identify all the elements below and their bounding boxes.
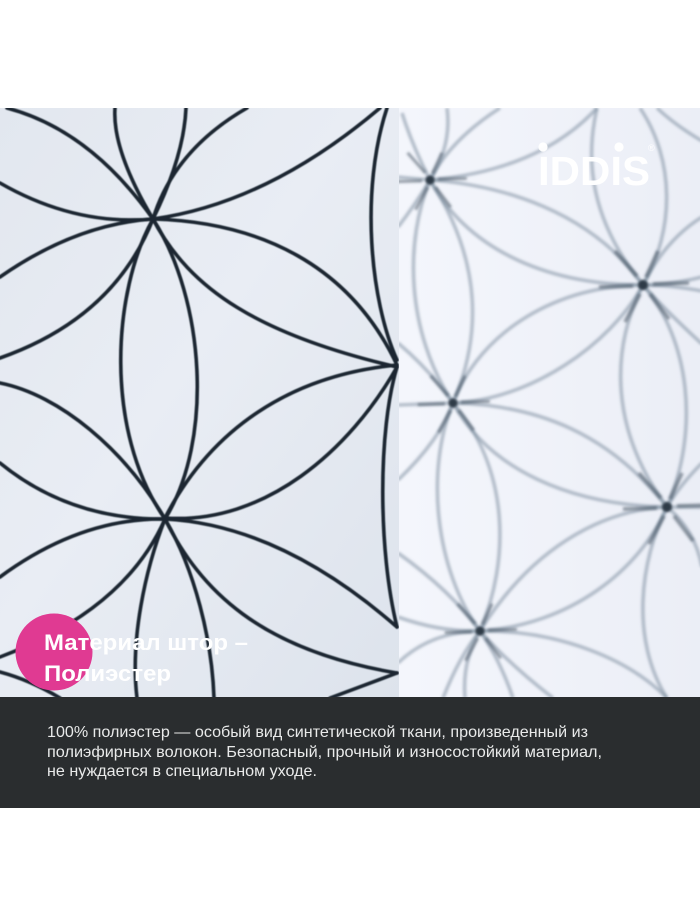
description text: 100% полиэстер — особый вид синтетической ткани, произведенный из [47, 724, 588, 741]
heading: Материал штор – [44, 630, 248, 655]
infographic canvas [0, 108, 700, 808]
panel: blurred curtain fabric photo [395, 108, 700, 698]
logo: IDDIS: IDDIS [538, 148, 650, 194]
heading: Полиэстер [44, 661, 171, 686]
description text: полиэфирных волокон. Безопасный, прочный и износостойкий материал, [47, 744, 602, 761]
description text: не нуждается в специальном уходе. [47, 763, 317, 780]
heading [44, 630, 248, 686]
description band [0, 697, 700, 808]
panel: sharp curtain fabric photo [0, 108, 399, 698]
logo: IDDIS: ® [648, 143, 655, 153]
description text [47, 724, 602, 780]
pink circle accent [16, 614, 92, 690]
